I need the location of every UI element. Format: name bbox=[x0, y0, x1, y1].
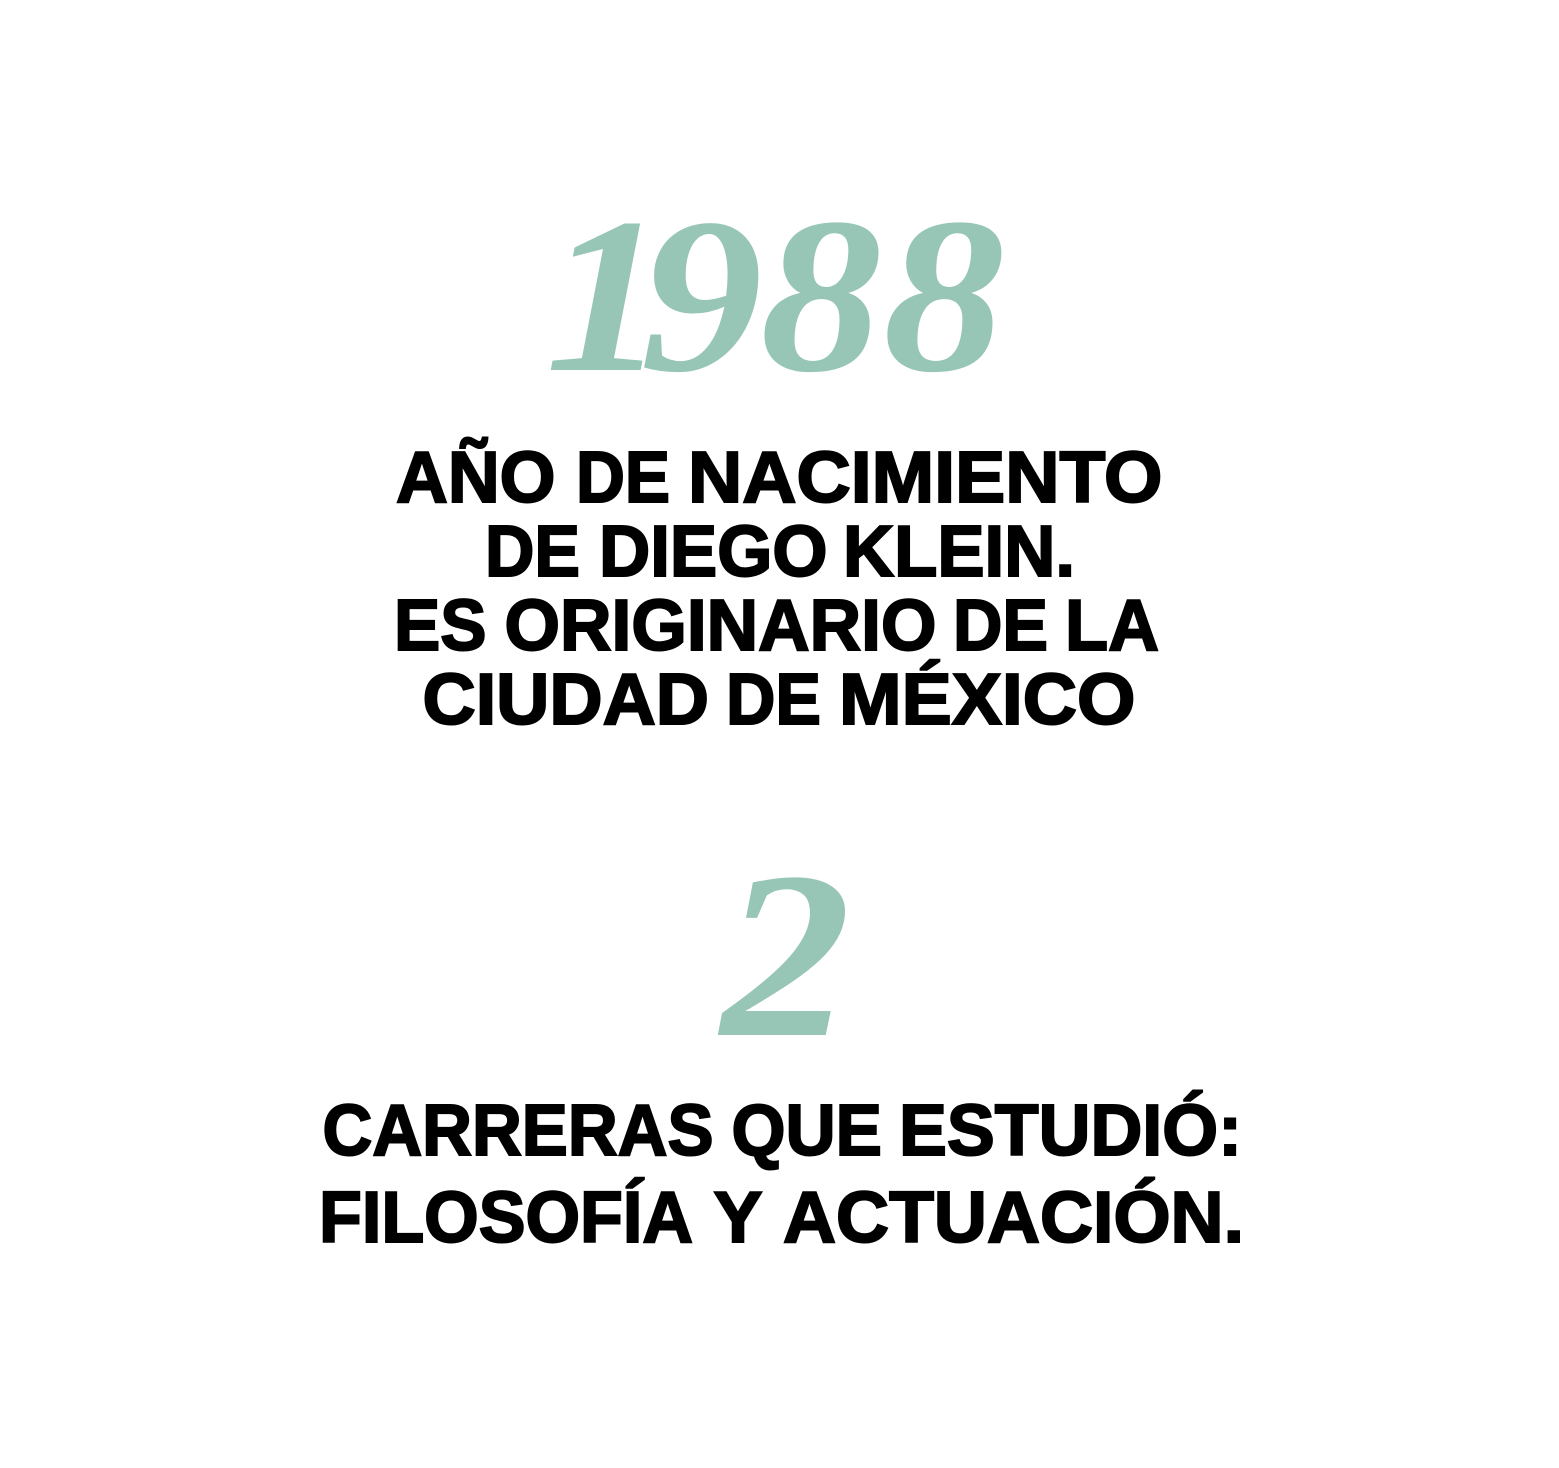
text block: birth year description: MÉXICO bbox=[839, 660, 1136, 740]
number: 2: 2 bbox=[718, 824, 851, 1087]
text block: degrees studied bbox=[319, 1090, 1244, 1258]
text block: birth year description: LA bbox=[1065, 586, 1159, 666]
text block: birth year description bbox=[394, 437, 1162, 740]
text block: birth year description: DE bbox=[953, 586, 1048, 666]
text block: birth year description: AÑO bbox=[396, 437, 556, 518]
text block: birth year description: DE bbox=[485, 512, 580, 592]
number: 1988: 1988 bbox=[545, 173, 1005, 419]
text block: degrees studied: QUE bbox=[732, 1091, 882, 1171]
text block: degrees studied: ACTUACIÓN. bbox=[783, 1177, 1244, 1258]
text block: birth year description: NACIMIENTO bbox=[688, 438, 1162, 518]
text block: degrees studied: FILOSOFÍA bbox=[319, 1178, 693, 1258]
text block: degrees studied: ESTUDIÓ: bbox=[899, 1090, 1242, 1171]
text block: birth year description: KLEIN. bbox=[843, 512, 1075, 592]
text block: birth year description: DE bbox=[726, 660, 821, 740]
text block: birth year description: CIUDAD bbox=[422, 660, 709, 740]
text block: birth year description: DE bbox=[576, 438, 670, 518]
text block: degrees studied: Y bbox=[714, 1178, 762, 1258]
text block: birth year description: ES bbox=[394, 586, 486, 666]
text block: birth year description: DIEGO bbox=[599, 512, 828, 592]
text block: degrees studied: CARRERAS bbox=[322, 1091, 714, 1171]
text block: birth year description: ORIGINARIO bbox=[504, 586, 936, 666]
